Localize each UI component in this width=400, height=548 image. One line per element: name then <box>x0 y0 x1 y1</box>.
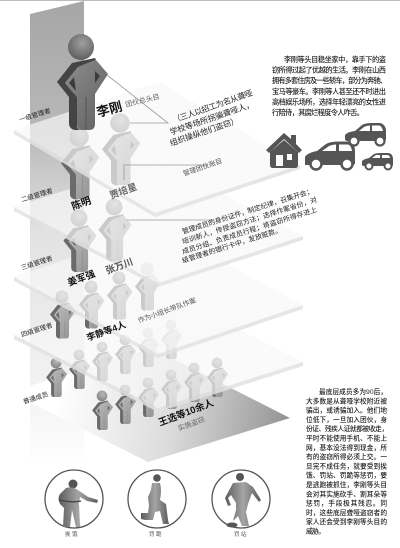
icon: house <box>266 133 302 168</box>
name labels: 管理团伙账目 <box>182 156 223 178</box>
text block: bottom members: 是逃跑被抓住，李刚等头目 <box>306 480 387 489</box>
text block: leaders' life: 高档娱乐场所，选择年轻漂亮的女性进 <box>272 98 386 106</box>
level labels: 四级管理者 <box>20 320 54 339</box>
text block: bottom members: 网，基本没法得到现金，所 <box>306 443 387 452</box>
callout: recruitment note <box>168 87 255 148</box>
level labels: 三级管理者 <box>20 253 54 272</box>
icon: hunger punishment figure <box>45 470 103 528</box>
level labels <box>18 106 54 406</box>
text block: leaders' life: 行陪侍，其腐烂程度令人咋舌。 <box>272 108 364 117</box>
punishment labels: 挨 饿 <box>65 530 78 538</box>
top rule <box>0 0 400 1</box>
icon: large car <box>305 142 355 170</box>
text block: bottom members: 大多数是从聋哑学校附近被 <box>306 396 387 405</box>
name labels: 张万川 <box>104 256 135 277</box>
level labels: 一级管理者 <box>18 106 52 124</box>
level labels: 普通成员 <box>22 389 50 406</box>
level four managers <box>50 262 160 338</box>
text block: bottom members <box>306 387 388 536</box>
text block: bottom members: 有的盗窃所得必须上交。一 <box>306 452 387 461</box>
text block: bottom members: 会对其实施砍手、割耳朵等 <box>306 489 387 498</box>
text block: bottom members: 平时不能使用手机、不能上 <box>306 434 387 442</box>
plane: level four <box>14 289 303 412</box>
callout: recruitment note: 学校等场所拐骗聋哑人， <box>168 99 255 137</box>
name labels: 王选等10余人 <box>157 397 216 429</box>
text block: bottom members: 家人还会受到李刚等头目的 <box>306 517 387 526</box>
base plane <box>10 348 290 462</box>
text block: bottom members: 骗出，或诱骗加入。他们地 <box>306 406 387 415</box>
level one leader <box>57 34 108 130</box>
name labels: 陈明 <box>70 194 93 213</box>
text block: leaders' life: 拥有多套住房及一些轿车，部分为奔驰、 <box>272 76 387 85</box>
icon: kneeling punishment figure <box>128 470 186 528</box>
name labels: 姜军强 <box>66 268 97 289</box>
plane: level two <box>14 160 303 287</box>
punishment labels: 罚 跪 <box>149 530 162 538</box>
name labels: 贾培星 <box>108 181 139 202</box>
text block: leaders' life: 宝马等豪车。李刚等人甚至还不时进出 <box>272 87 386 96</box>
text block: bottom members: 位低下，一旦加入团伙，身 <box>306 415 387 424</box>
name labels: 作为小组长带队作案 <box>137 295 197 325</box>
name labels: 李刚 <box>95 99 124 120</box>
callout: manager duties: 成员分组、负责成员行程；将盗窃所得存进上 <box>181 205 318 256</box>
callout: manager duties: 级管理者的银行卡中，发放赃款。 <box>181 225 283 265</box>
icon: upper car <box>345 123 386 146</box>
text block: bottom members: 最底层成员多为90后， <box>319 387 387 396</box>
callout: manager duties: 管理成员的身份证件，制定纪律，召集开会； <box>181 186 314 236</box>
text block: bottom members: 时，这些底层聋哑盗窃者的 <box>306 508 387 517</box>
name labels: 李静等4人 <box>85 319 127 343</box>
text block: leaders' life: 李刚等头目稳坐家中，靠手下的盗 <box>284 55 386 64</box>
icon: small car <box>362 153 393 170</box>
callout: manager duties: 培训新人，传授盗窃方法；选择作案省份，对 <box>181 195 318 246</box>
name labels <box>66 92 223 433</box>
text block: leaders' life <box>272 55 387 117</box>
punishment labels <box>65 530 247 538</box>
text block: bottom members: 惩罚，手段极其残忍。同 <box>306 499 387 508</box>
text block: bottom members: 饿、罚站、罚跪等惩罚，要 <box>306 471 387 480</box>
plane: level three <box>14 228 303 358</box>
text block: bottom members: 旦完不成任务，就要受到挨 <box>306 461 387 470</box>
level two managers <box>61 113 140 199</box>
vertical wall panel <box>30 1 84 465</box>
callout: recruitment note: 组织操纵他们盗窃） <box>168 115 240 148</box>
text block: leaders' life: 窃所得过起了优越的生活。李刚在山西 <box>272 66 386 74</box>
callout: manager duties <box>181 186 318 265</box>
level labels: 二级管理者 <box>20 186 54 204</box>
text block: bottom members: 份证、残疾人证就都被收走， <box>306 424 388 433</box>
plane: level one <box>14 82 300 217</box>
name labels: 团伙总头目 <box>124 92 160 109</box>
punishment labels: 罚 站 <box>234 530 247 538</box>
callout: recruitment note: （三人以招工为名从聋哑 <box>171 87 254 125</box>
text block: bottom members: 威胁。 <box>306 526 325 536</box>
icon: standing punishment figure <box>212 470 270 528</box>
level three managers <box>63 199 132 272</box>
name labels: 实施盗窃 <box>176 414 206 433</box>
leader lines <box>107 75 213 220</box>
ordinary members group <box>46 320 228 430</box>
